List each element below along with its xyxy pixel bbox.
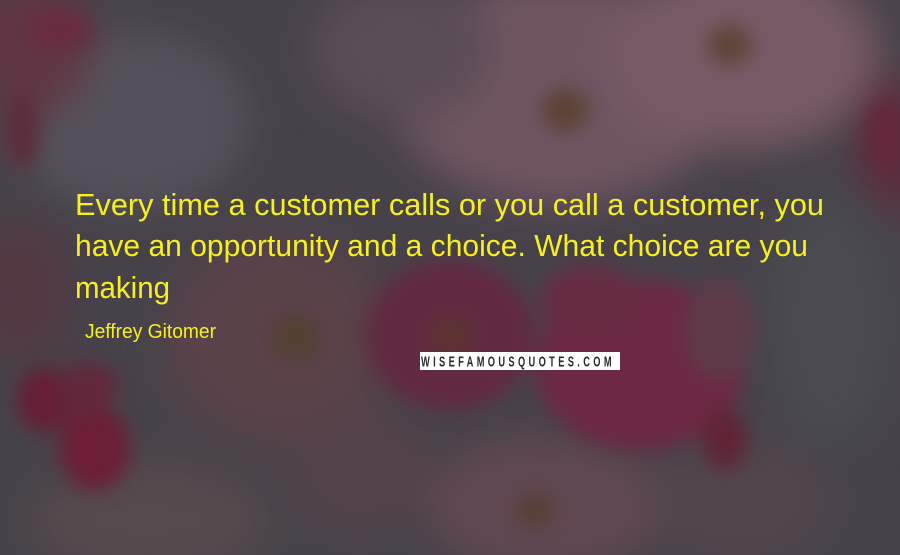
- author attribution: Jeffrey Gitomer: [85, 321, 216, 343]
- watermark badge: WISEFAMOUSQUOTES.COM: [421, 353, 615, 370]
- quote text: Every time a customer calls or you call a customer, you: [75, 187, 824, 222]
- quote text: making: [75, 270, 170, 305]
- quote text: have an opportunity and a choice. What choice are you: [75, 228, 808, 263]
- quote text: [75, 187, 824, 305]
